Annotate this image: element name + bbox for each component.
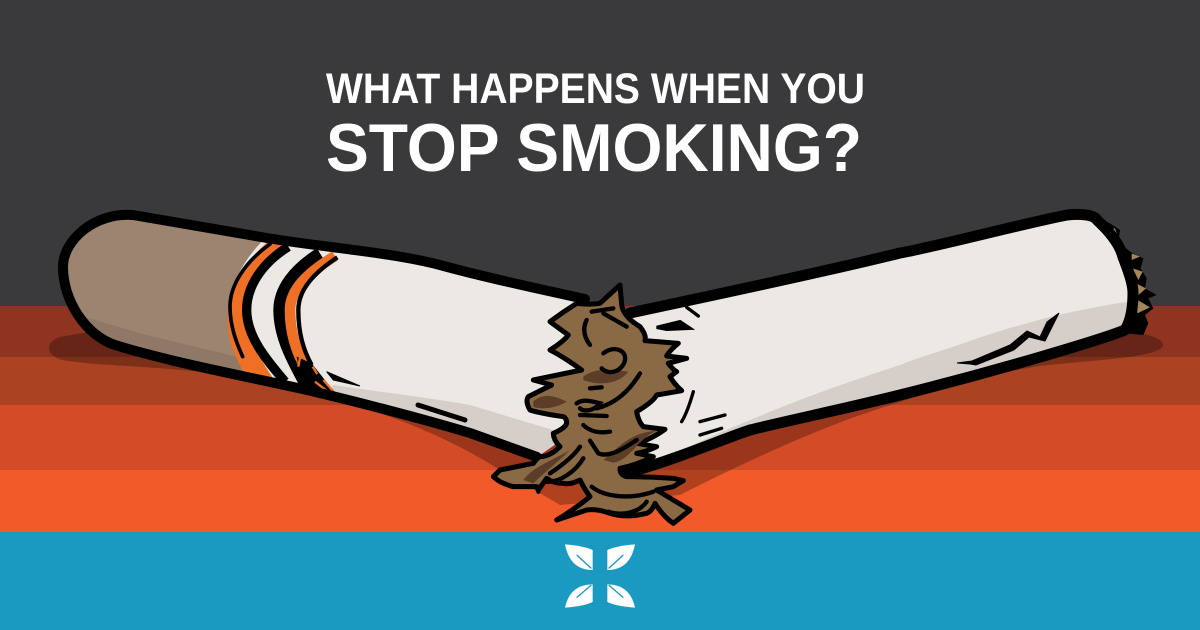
right paper tear marks — [657, 307, 725, 435]
tobacco shape — [493, 285, 690, 523]
bottom-left leaf — [565, 584, 593, 608]
top-right leaf — [607, 544, 635, 570]
tobacco ink strokes — [538, 308, 653, 514]
title — [326, 65, 865, 186]
background: striped orange table bands — [0, 306, 1200, 532]
left half of cigarette — [58, 210, 590, 461]
top-left leaf — [565, 544, 593, 570]
left paper scratch marks — [418, 405, 465, 420]
bottom-right leaf — [607, 584, 635, 608]
left paper tube — [238, 242, 576, 454]
cigarette: broken in two — [40, 200, 1157, 523]
right tube outline — [627, 214, 1133, 473]
burnt tobacco end — [1097, 217, 1157, 335]
background: dark upper area — [0, 0, 1200, 306]
footer: blue band — [0, 532, 1200, 630]
left tube outline — [63, 215, 585, 457]
tobacco dark patches — [523, 370, 657, 483]
cigarette shadow — [49, 330, 1163, 505]
torn tobacco center — [493, 285, 725, 523]
right paper tube — [632, 220, 1128, 460]
title: WHAT HAPPENS WHEN YOU — [326, 65, 865, 113]
crack in right paper — [957, 313, 1059, 365]
right half of cigarette — [622, 208, 1156, 474]
logo: four white leaves — [565, 544, 635, 608]
title: STOP SMOKING? — [326, 110, 862, 186]
filter tip with orange and black bands — [60, 213, 360, 393]
